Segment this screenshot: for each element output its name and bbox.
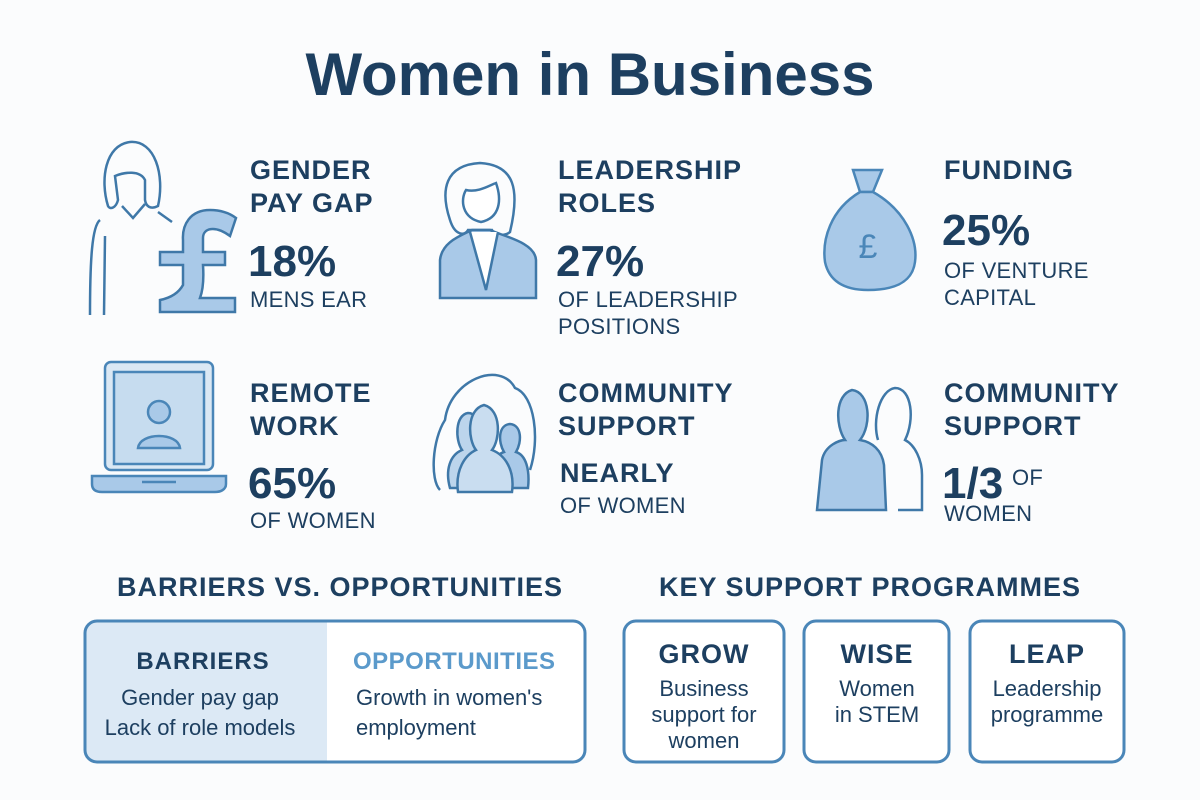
text: remote work: 65% (248, 459, 336, 508)
icon: woman with pound sign (90, 142, 236, 315)
text: community support 1/3: OF (1012, 465, 1043, 490)
panel: WISE: WISE (840, 639, 914, 669)
text: funding: OF VENTURE (944, 258, 1089, 283)
icon: businesswoman (440, 163, 536, 298)
text: community support nearly (558, 378, 733, 518)
text: leadership roles: OF LEADERSHIP (558, 287, 738, 312)
title: Women in Business (305, 41, 875, 108)
text: remote work (248, 378, 376, 533)
icon: laptop (92, 362, 226, 492)
text: leadership roles: LEADERSHIP (558, 155, 742, 185)
panel: LEAP: programme (991, 702, 1103, 727)
text: community support nearly: COMMUNITY (558, 378, 733, 408)
heading: key support programmes: KEY SUPPORT PROGRAMMES (659, 572, 1081, 602)
text: gender pay gap: MENS EAR (250, 287, 367, 312)
text: funding (942, 155, 1089, 310)
panel: LEAP (970, 621, 1124, 762)
opportunities column: OPPORTUNITIES (353, 648, 556, 675)
text: leadership roles: 27% (556, 237, 644, 286)
text: gender pay gap: GENDER (250, 155, 372, 185)
panel: GROW: Business (659, 676, 749, 701)
barriers column (105, 648, 295, 740)
icon: community group (434, 375, 535, 492)
text: gender pay gap: PAY GAP (250, 188, 374, 218)
icon: money bag: £ (859, 228, 878, 266)
text: community support 1/3: SUPPORT (944, 411, 1082, 441)
text: community support nearly: NEARLY (560, 458, 675, 488)
panel: GROW: women (668, 728, 739, 753)
opportunities column: Growth in women's (356, 685, 542, 710)
panel: LEAP: LEAP (1009, 639, 1085, 669)
icon: money bag (824, 170, 915, 290)
text: remote work: WORK (250, 411, 339, 441)
text: community support nearly: SUPPORT (558, 411, 696, 441)
text: community support 1/3: COMMUNITY (944, 378, 1119, 408)
text: gender pay gap (248, 155, 374, 312)
text: gender pay gap: 18% (248, 237, 336, 286)
opportunities column (353, 648, 556, 740)
text: leadership roles: ROLES (558, 188, 656, 218)
text: community support 1/3 (942, 378, 1119, 526)
text: leadership roles (556, 155, 742, 339)
opportunities column: employment (356, 715, 476, 740)
heading: barriers vs opportunities: BARRIERS VS. OPPORTUNITIES (117, 572, 563, 602)
panel: GROW (624, 621, 784, 762)
barriers column: BARRIERS (136, 648, 270, 675)
text: funding: FUNDING (944, 155, 1074, 185)
panel: WISE (804, 621, 949, 762)
text: remote work: OF WOMEN (250, 508, 376, 533)
panel: WISE: in STEM (835, 702, 919, 727)
text: community support 1/3: 1/3 (942, 459, 1003, 508)
text: funding: CAPITAL (944, 285, 1036, 310)
text: community support nearly: OF WOMEN (560, 493, 686, 518)
text: remote work: REMOTE (250, 378, 372, 408)
panel: WISE: Women (839, 676, 915, 701)
text: funding: 25% (942, 206, 1030, 255)
panel: LEAP: Leadership (993, 676, 1101, 701)
panel: GROW: support for (651, 702, 757, 727)
panel: barriers vs opportunities (85, 621, 585, 762)
text: leadership roles: POSITIONS (558, 314, 680, 339)
text: community support 1/3: WOMEN (944, 501, 1032, 526)
icon: two people (817, 388, 922, 510)
barriers column: Lack of role models (105, 715, 295, 740)
barriers column: Gender pay gap (121, 685, 279, 710)
panel: GROW: GROW (658, 639, 750, 669)
